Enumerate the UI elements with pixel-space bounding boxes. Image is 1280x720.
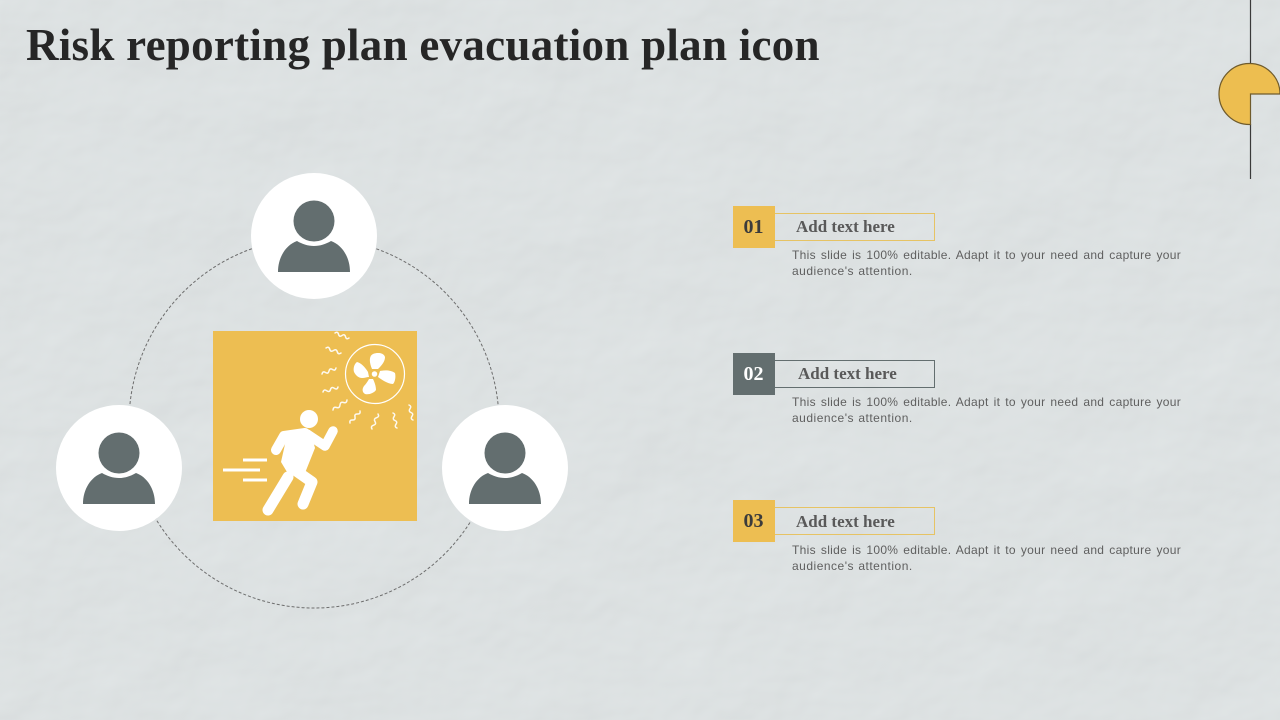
icon: right person [442, 405, 568, 531]
heading 01: Add text here [796, 217, 895, 236]
description 03: This slide is 100% editable. Adapt it to your need and capture your [792, 543, 1181, 557]
number badge 01 [733, 206, 775, 248]
title: Risk reporting plan evacuation plan icon [26, 20, 820, 70]
description 03 [792, 543, 1181, 573]
item 03 [733, 500, 1181, 573]
number badge 03 [733, 500, 775, 542]
decorative corner emblem [1218, 0, 1280, 179]
dashed ring [130, 248, 498, 608]
number badge 01: 01 [744, 216, 764, 238]
description 02: This slide is 100% editable. Adapt it to your need and capture your [792, 395, 1181, 409]
icon: left person [56, 405, 182, 531]
description 01: audience's attention. [792, 264, 913, 278]
heading 03: Add text here [796, 512, 895, 531]
description 02 [792, 395, 1181, 425]
description 02: audience's attention. [792, 411, 913, 425]
description 01: This slide is 100% editable. Adapt it to your need and capture your [792, 248, 1181, 262]
description 01 [792, 248, 1181, 278]
heading 02: Add text here [798, 364, 897, 383]
number badge 03: 03 [744, 510, 764, 532]
item 02 [733, 353, 1181, 425]
number badge 02 [733, 353, 775, 395]
icon: top person [251, 173, 377, 299]
label box 02 [775, 360, 935, 388]
description 03: audience's attention. [792, 559, 913, 573]
label box 03 [775, 507, 935, 535]
item 01 [733, 206, 1181, 278]
icon: person running from fan [213, 331, 417, 521]
number badge 02: 02 [744, 363, 764, 385]
label box 01 [775, 213, 935, 241]
